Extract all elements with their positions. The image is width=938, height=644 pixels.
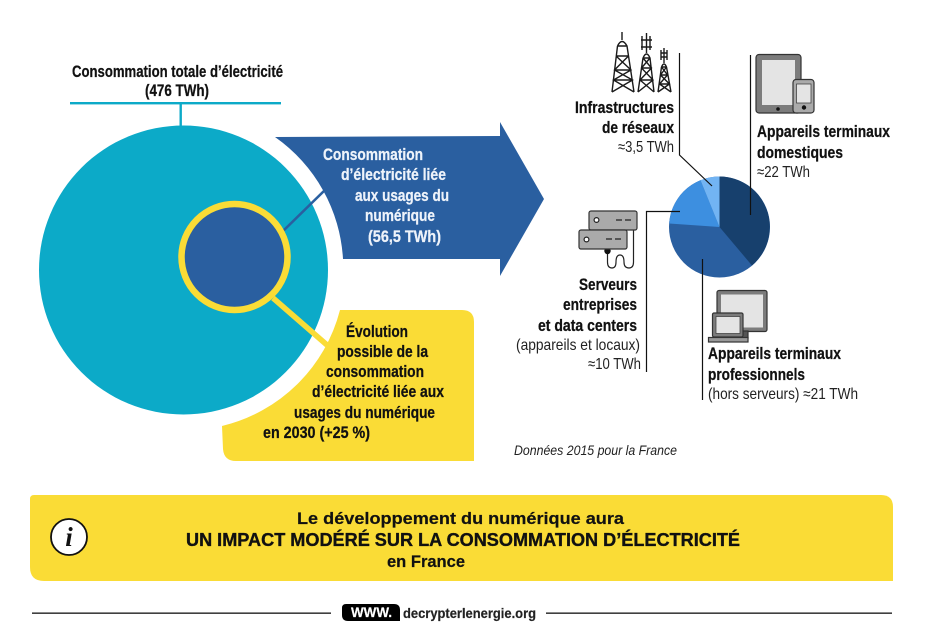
label: servers: entreprises bbox=[563, 296, 637, 314]
label: home devices: ≈22 TWh bbox=[757, 164, 810, 181]
label: home devices bbox=[757, 123, 891, 181]
icon: servers bbox=[579, 211, 637, 268]
footer: website bbox=[342, 604, 536, 621]
bracket connecting title to circle bbox=[70, 102, 281, 127]
arrow: digital consumption: Consommation bbox=[323, 146, 423, 164]
label: servers bbox=[516, 276, 641, 373]
icon: info bbox=[51, 519, 87, 555]
title: total consumption: Consommation totale d’électricité bbox=[72, 63, 283, 81]
label: home devices: domestiques bbox=[757, 144, 843, 162]
arrow: digital consumption: numérique bbox=[365, 207, 435, 225]
icon: monitor and laptop bbox=[708, 290, 767, 342]
banner: en France bbox=[387, 552, 465, 571]
label: professional devices bbox=[708, 345, 858, 403]
callout: evolution 2030: usages du numérique bbox=[294, 404, 435, 422]
label: network infrastructure bbox=[575, 99, 675, 156]
connector line: circle to arrow bbox=[280, 189, 326, 234]
label: servers: et data centers bbox=[538, 317, 637, 335]
magnifier bbox=[182, 204, 327, 345]
banner bbox=[30, 495, 893, 581]
label: professional devices: Appareils terminaux bbox=[708, 345, 842, 363]
arrow: digital consumption: d’électricité liée bbox=[341, 166, 446, 184]
callout: evolution 2030: d’électricité liée aux bbox=[312, 383, 445, 401]
callout: evolution 2030: en 2030 (+25 %) bbox=[263, 424, 370, 442]
title: total consumption: (476 TWh) bbox=[145, 82, 209, 100]
label: network infrastructure: de réseaux bbox=[602, 119, 675, 137]
footer: website: decrypterlenergie.org bbox=[403, 605, 536, 621]
label: home devices: Appareils terminaux bbox=[757, 123, 891, 141]
label: network infrastructure: ≈3,5 TWh bbox=[618, 139, 674, 156]
banner: Le développement du numérique aura bbox=[297, 509, 625, 528]
callout: evolution 2030: consommation bbox=[326, 363, 424, 381]
label: professional devices: professionnels bbox=[708, 366, 805, 384]
big circle: total consumption bbox=[39, 126, 328, 414]
label: network infrastructure: Infrastructures bbox=[575, 99, 674, 117]
icon: tablet and phone bbox=[756, 54, 814, 113]
footer rules bbox=[32, 612, 892, 614]
banner: UN IMPACT MODÉRÉ SUR LA CONSOMMATION D’ÉLECTRICITÉ bbox=[186, 529, 740, 550]
callout: evolution 2030: Évolution bbox=[346, 322, 408, 341]
arrow: digital consumption bbox=[275, 122, 544, 276]
footer: website: WWW. bbox=[351, 604, 392, 620]
arrow: digital consumption: aux usages du bbox=[355, 187, 449, 205]
label: servers: (appareils et locaux) bbox=[516, 337, 640, 354]
source note: Données 2015 pour la France bbox=[514, 442, 677, 458]
title: total consumption bbox=[72, 63, 283, 100]
arrow: digital consumption: (56,5 TWh) bbox=[368, 228, 441, 246]
leader lines bbox=[646, 53, 750, 400]
label: professional devices: (hors serveurs) ≈21 TWh bbox=[708, 386, 858, 403]
callout: evolution 2030: possible de la bbox=[337, 343, 429, 361]
label: servers: Serveurs bbox=[579, 276, 637, 294]
pie chart bbox=[669, 176, 770, 278]
label: servers: ≈10 TWh bbox=[588, 356, 641, 373]
icon: info: i bbox=[65, 522, 73, 552]
icon: network towers bbox=[612, 32, 671, 92]
callout: evolution 2030 bbox=[222, 310, 474, 461]
